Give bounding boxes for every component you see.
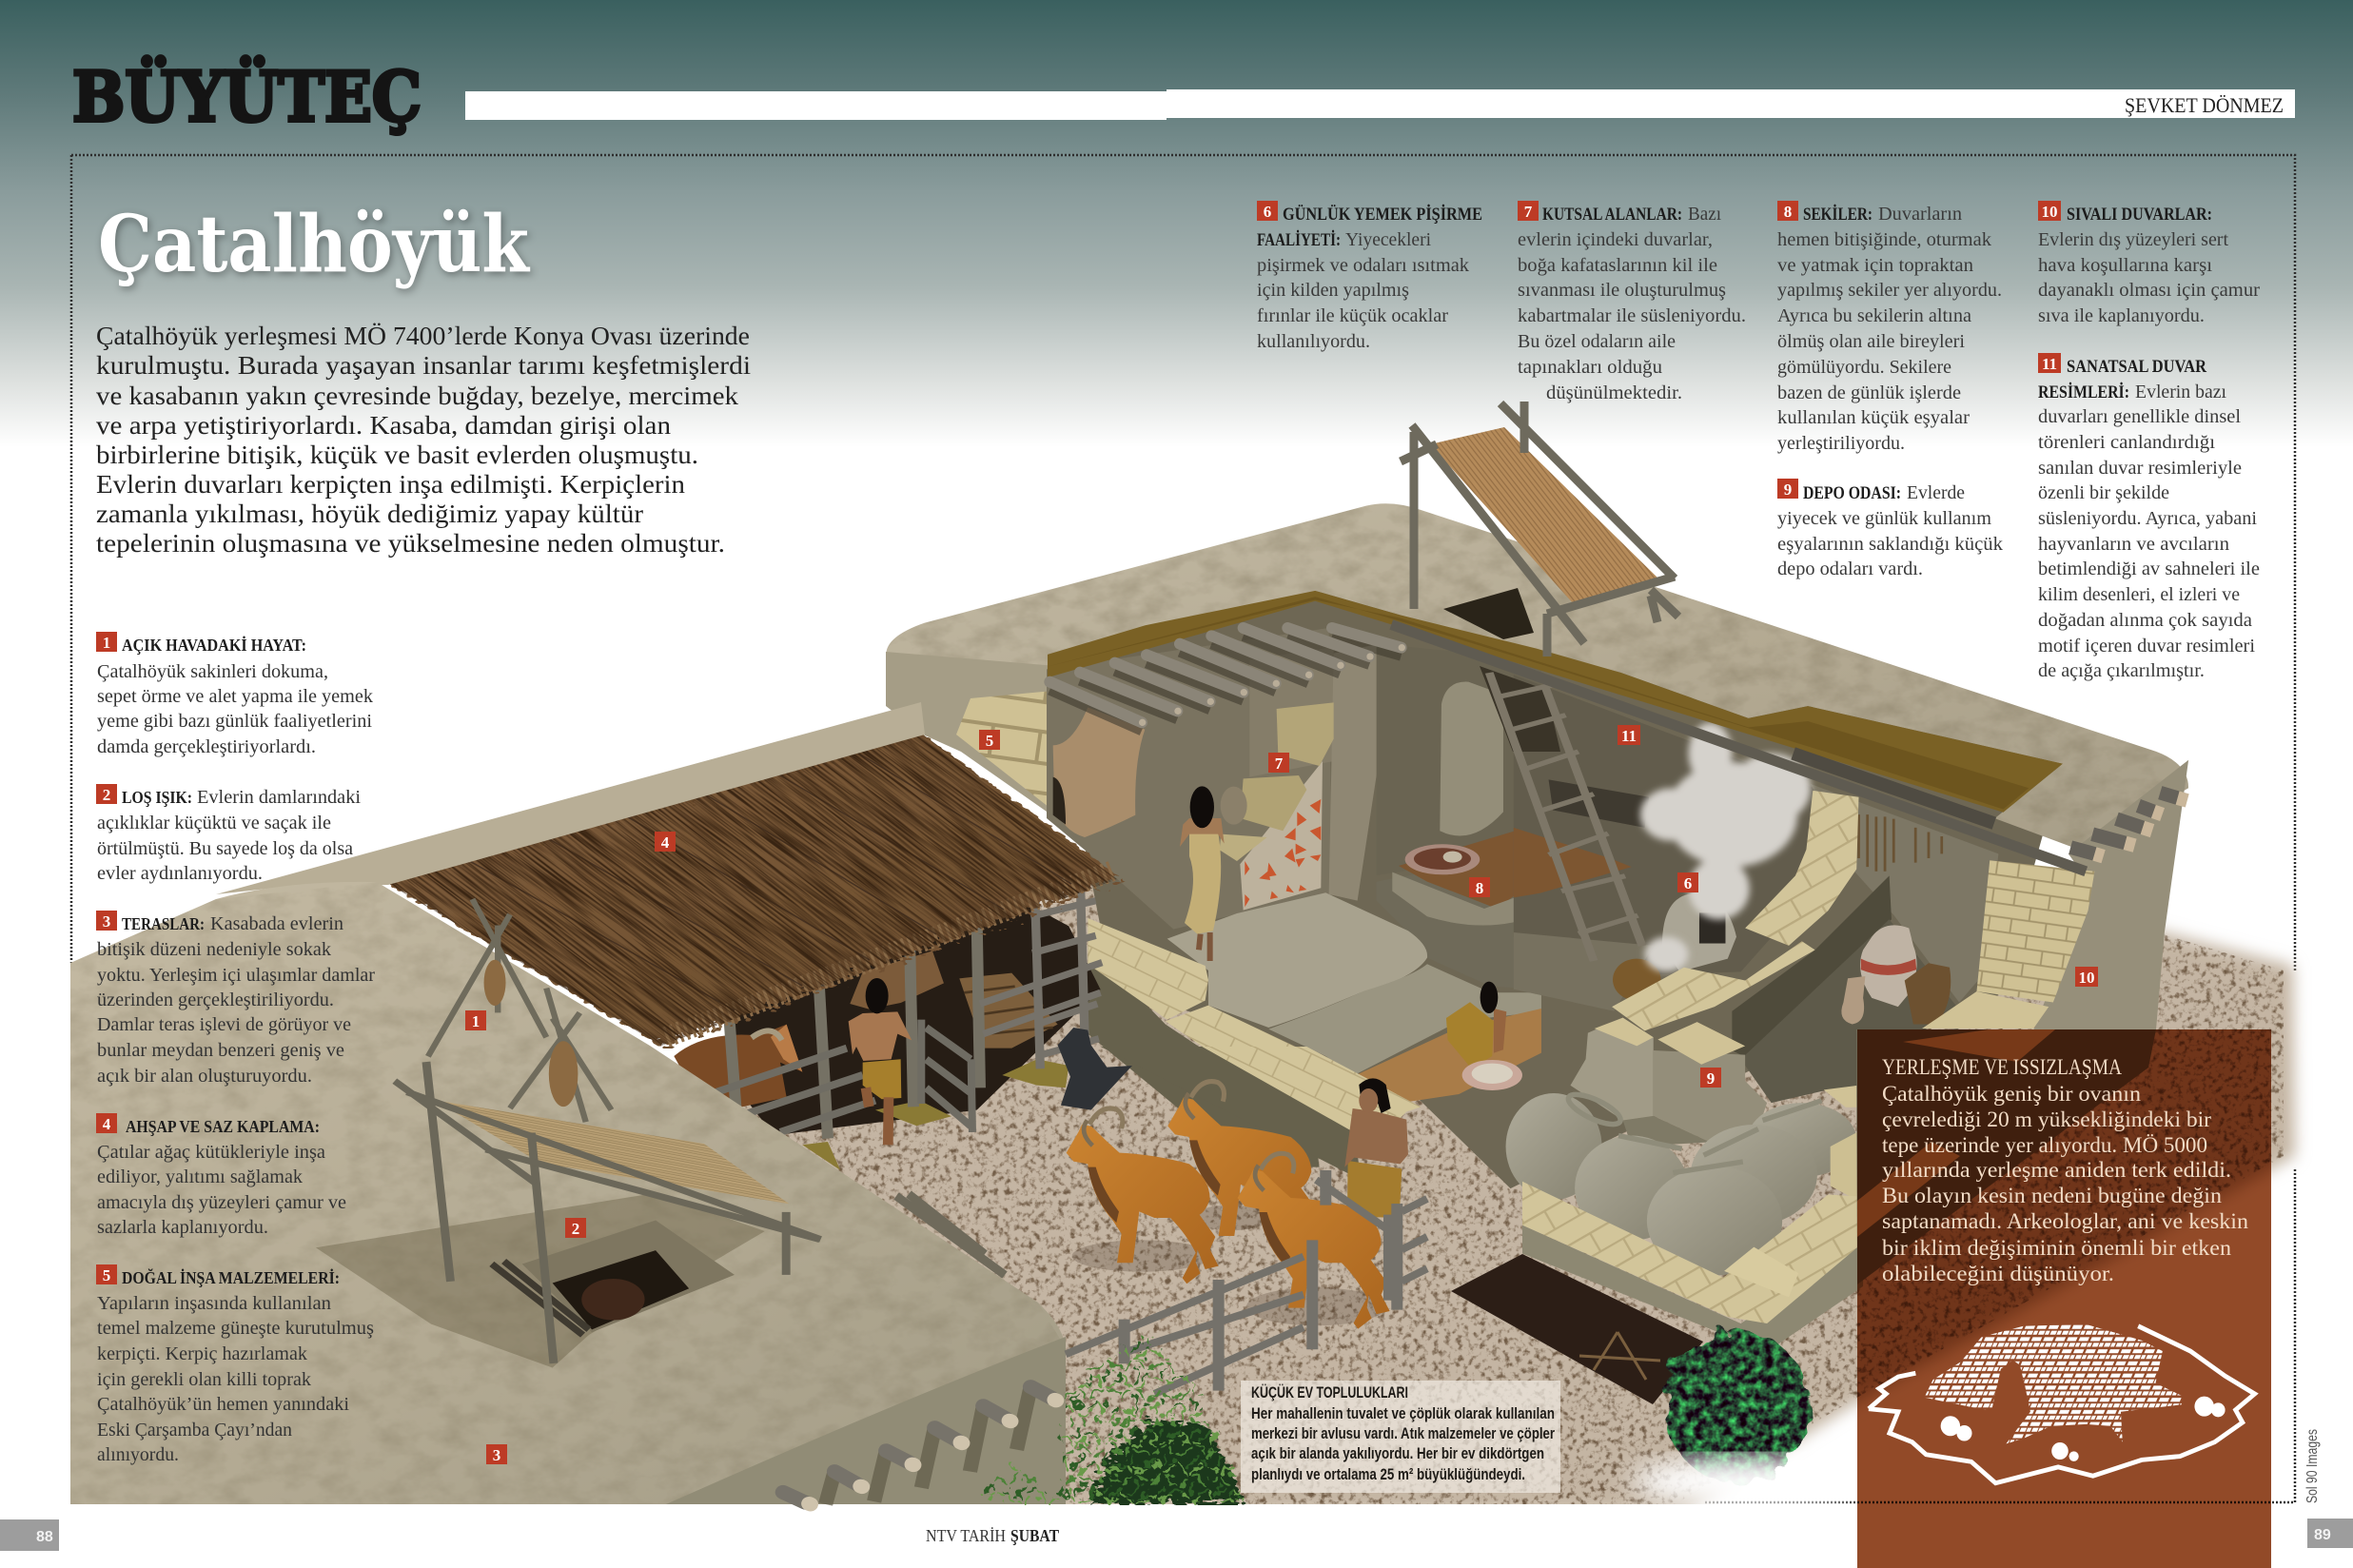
note 6: daily cooking: 6	[1264, 203, 1271, 221]
note 2: dim light	[96, 784, 361, 884]
footer: magazine name: NTV TARİH	[926, 1526, 1006, 1545]
note 5: natural building materials: DOĞAL İNŞA MALZEMELERİ:	[122, 1267, 340, 1287]
shelter shadow	[316, 1193, 765, 1368]
callout numbers on illustration: 6	[1684, 874, 1692, 892]
intro paragraph: kurulmuştu. Burada yaşayan insanlar tarımı keşfetmişlerdi	[96, 351, 751, 380]
terrace hatch and shelter	[316, 899, 1056, 1504]
section title: BÜYÜTEÇ: BÜYÜTEÇ	[72, 55, 422, 137]
front-left wall continuation	[1101, 1047, 1421, 1180]
dark opening behind ladder	[1480, 666, 1560, 752]
note 7: sacred areas	[1518, 201, 1746, 403]
long inner wall face	[1732, 875, 1892, 1057]
note 11: artistic wall paintings: RESİMLERİ:	[2038, 382, 2129, 402]
animal hide	[1053, 707, 1145, 837]
callout numbers on illustration: 5	[986, 732, 993, 750]
brick ledge	[1220, 834, 1267, 861]
panel text	[1882, 1055, 2249, 1285]
note 6: daily cooking	[1257, 201, 1482, 352]
shelter reed panel	[1430, 427, 1661, 604]
note 3: terraces: bunlar meydan benzeri geniş ve	[97, 1040, 344, 1061]
note 8: benches: gömülüyordu. Sekilere	[1777, 357, 1951, 378]
note 6: daily cooking: kullanılıyordu.	[1257, 331, 1370, 352]
straw mats	[802, 1059, 1069, 1170]
note 5: natural building materials: Eski Çarşamba Çayı’ndan	[97, 1420, 292, 1441]
panel: settlement and abandonment	[1857, 1029, 2271, 1568]
note 10: plastered walls: dayanaklı olması için çamur	[2038, 280, 2260, 301]
front brick wall top	[1522, 1182, 1863, 1323]
page edge mask below illustration	[971, 1505, 1294, 1534]
panel text: çevrelediği 20 m yüksekliğindeki bir	[1882, 1107, 2211, 1131]
note 2: dim light: örtülmüştü. Bu sayede loş da olsa	[97, 838, 353, 859]
note 5: natural building materials: Yapıların inşasında kullanılan	[97, 1293, 331, 1314]
note 2: dim light: evler aydınlanıyordu.	[97, 863, 263, 884]
panel text: olabileceğini düşünüyor.	[1882, 1262, 2114, 1285]
note 4: wood and reed covering: AHŞAP VE SAZ KAPLAMA:	[126, 1117, 320, 1136]
note 9: storeroom: DEPO ODASI:	[1803, 483, 1901, 503]
wall face	[1101, 1047, 1361, 1180]
note 11: artistic wall paintings: hayvanların ve avcıların	[2038, 534, 2229, 555]
note 3: terraces: yoktu. Yerleşim içi ulaşımlar damlar	[97, 965, 375, 986]
note 1: open-air life: Çatalhöyük sakinleri dokuma,	[97, 661, 328, 682]
note 2: dim light: Evlerin damlarındaki	[197, 787, 361, 808]
note 2: dim light: LOŞ IŞIK:	[122, 788, 192, 807]
shrub	[1632, 1330, 1860, 1506]
callout: small house communities: Her mahallenin tuvalet ve çöplük olarak kullanılan	[1251, 1404, 1555, 1422]
stone pier	[1249, 647, 1334, 777]
intro paragraph: ve kasabanın yakın çevresinde buğday, bezelye, mercimek	[96, 382, 739, 410]
footer: magazine name: ŞUBAT	[1010, 1526, 1059, 1545]
storage pots	[1841, 925, 1951, 1024]
note 11: artistic wall paintings: kilim desenleri, el izleri ve	[2038, 584, 2240, 605]
icon: settlement mound	[1869, 1324, 2255, 1483]
note 11: artistic wall paintings: 11	[2042, 355, 2057, 373]
note 11: artistic wall paintings: süsleniyordu. Ayrıca, yabani	[2038, 508, 2257, 529]
callout: small house communities	[1241, 1381, 1560, 1493]
rafter ends	[1139, 644, 1405, 726]
note 1: open-air life: sepet örme ve alet yapma ile yemek	[97, 686, 373, 707]
ladder	[1489, 673, 1642, 961]
note 10: plastered walls: hava koşullarına karşı	[2038, 255, 2212, 276]
grain sacks	[1506, 1093, 1856, 1275]
note 4: wood and reed covering: 4	[103, 1115, 111, 1133]
note 10: plastered walls: Evlerin dış yüzeyleri sert	[2038, 229, 2228, 250]
stepped brick wall	[1745, 791, 1859, 946]
smoky room back wall	[1514, 675, 1815, 976]
front-left wall face	[1088, 945, 1320, 1167]
header bar	[465, 89, 2295, 120]
note 8: benches: hemen bitişiğinde, oturmak	[1777, 229, 1991, 250]
page number 88	[0, 1519, 59, 1551]
note 8: benches: ve yatmak için topraktan	[1777, 255, 1973, 276]
stabled goat	[674, 1025, 802, 1107]
man beside fence	[1344, 1078, 1408, 1218]
hatch ladder logs	[492, 1262, 589, 1335]
note 6: daily cooking: için kilden yapılmış	[1257, 280, 1409, 301]
back floor	[1377, 850, 1541, 990]
wall pegs	[783, 1387, 1051, 1502]
panel text: YERLEŞME VE ISSIZLAŞMA	[1882, 1055, 2122, 1079]
note 7: sacred areas: Bu özel odaların aile	[1518, 331, 1676, 352]
image credit: Sol 90 Images	[2304, 1429, 2321, 1503]
note 7: sacred areas: düşünülmektedir.	[1546, 382, 1682, 403]
callout numbers on illustration: 3	[493, 1446, 500, 1464]
note 3: terraces: bitişik düzeni nedeniyle sokak	[97, 939, 331, 960]
intro paragraph: ve arpa yetiştiriyorlardı. Kasaba, damdan girişi olan	[96, 411, 672, 440]
lower brick ledge	[1612, 941, 1815, 1030]
left room wall	[1047, 628, 1332, 930]
note 7: sacred areas: evlerin içindeki duvarlar,	[1518, 229, 1713, 250]
upper bricks	[1277, 702, 1334, 766]
back floor	[1514, 932, 1654, 1011]
callout numbers on illustration: 11	[1621, 727, 1637, 745]
clay jar	[1613, 959, 1661, 1001]
grain floor	[1356, 1009, 1541, 1104]
note 4: wood and reed covering: Çatılar ağaç kütükleriyle inşa	[97, 1142, 325, 1163]
foreground plant	[980, 1334, 1246, 1504]
long roof beam	[1391, 624, 2086, 872]
illustration: Çatalhöyük house cutaway	[70, 400, 2304, 1511]
note 4: wood and reed covering: amacıyla dış yüzeyleri çamur ve	[97, 1192, 346, 1213]
wall top	[1202, 1047, 1421, 1130]
intro paragraph: tepelerinin oluşmasına ve yükselmesine neden olmuştur.	[96, 529, 725, 558]
note 1: open-air life: yeme gibi bazı günlük faaliyetlerini	[97, 711, 372, 732]
left wall block with bricks	[886, 652, 1056, 818]
note 7: sacred areas: 7	[1524, 203, 1533, 221]
note 7: sacred areas: Bazı	[1688, 204, 1721, 225]
note 3: terraces: üzerinden gerçekleştiriliyordu.	[97, 990, 334, 1010]
panel text: yıllarında yerleşme aniden terk edildi.	[1882, 1158, 2231, 1182]
note 11: artistic wall paintings: duvarları genellikle dinsel	[2038, 406, 2241, 427]
note 11: artistic wall paintings: törenleri canlandırdığı	[2038, 432, 2215, 453]
sack rims	[1564, 1088, 1821, 1173]
storage room wall left	[1571, 1018, 1654, 1125]
crouching woman	[1446, 982, 1522, 1090]
page number 89: 89	[2314, 1527, 2331, 1543]
note 11: artistic wall paintings: Evlerin bazı	[2135, 382, 2226, 402]
note 5: natural building materials: için gerekli olan killi toprak	[97, 1369, 311, 1390]
hanging bag two	[549, 1041, 578, 1107]
note 9: storeroom: depo odaları vardı.	[1777, 559, 1923, 579]
note 9: storeroom: Evlerde	[1907, 482, 1965, 503]
note 9: storeroom: yiyecek ve günlük kullanım	[1777, 508, 1991, 529]
note 1: open-air life: damda gerçekleştiriyorlardı.	[97, 736, 316, 757]
stable dark interior	[723, 904, 1101, 1135]
note 6: daily cooking: fırınlar ile küçük ocaklar	[1257, 305, 1448, 326]
panel text: tepe üzerinde yer alıyordu. MÖ 5000	[1882, 1133, 2207, 1157]
panel text: bir iklim değişiminin önemli bir etken	[1882, 1236, 2232, 1260]
hatch hole wall	[522, 1221, 735, 1332]
back wall	[1377, 644, 1541, 875]
intro paragraph: zamanla yıkılması, höyük dediğimiz yapay kültür	[96, 500, 643, 528]
note 8: benches: Ayrıca bu sekilerin altına	[1777, 305, 1971, 326]
note 10: plastered walls: sıva ile kaplanıyordu.	[2038, 305, 2205, 326]
right room back wall	[1811, 784, 1998, 1003]
hearth oven	[1662, 893, 1736, 971]
lower floor	[1268, 964, 1541, 1075]
note 10: plastered walls: 10	[2042, 203, 2057, 221]
note 3: terraces: 3	[103, 912, 110, 931]
long parapet ridge	[216, 702, 925, 894]
note 7: sacred areas: boğa kafataslarının kil ile	[1518, 255, 1717, 276]
person in hatch	[581, 1279, 645, 1321]
terrace roof	[70, 880, 1066, 1504]
standing woman	[1180, 786, 1225, 961]
panel text: Bu olayın kesin nedeni bugüne değin	[1882, 1184, 2223, 1207]
back-right wall slab	[1824, 1086, 1863, 1107]
right outer wall	[2029, 760, 2188, 1042]
brick block	[1088, 918, 1208, 1020]
room floor	[1741, 919, 1964, 1103]
note 3: terraces: TERASLAR:	[122, 914, 205, 933]
goat 3	[1238, 1153, 1390, 1329]
hanging tools	[1859, 814, 1942, 872]
house interior base	[1048, 591, 2063, 1188]
brick wall top band	[1166, 1006, 1415, 1154]
shelter reed panel	[434, 1100, 789, 1204]
header bar: ŞEVKET DÖNMEZ	[2125, 93, 2284, 117]
note 5: natural building materials: 5	[103, 1266, 110, 1284]
note 6: daily cooking: Yiyecekleri	[1345, 229, 1431, 250]
courtyard fence	[1066, 1170, 1427, 1394]
floor brick sill	[1922, 991, 2049, 1029]
note 5: natural building materials: temel malzeme güneşte kurutulmuş	[97, 1318, 374, 1339]
hatch dark opening	[553, 1250, 689, 1329]
stable fence	[716, 1020, 972, 1132]
wall doorway	[1053, 777, 1066, 825]
callout numbers on illustration: 4	[661, 833, 670, 852]
hanging bag one	[484, 960, 506, 1006]
note 11: artistic wall paintings: özenli bir şekilde	[2038, 482, 2169, 503]
pit below house	[1451, 1254, 1703, 1404]
note 4: wood and reed covering: ediliyor, yalıtımı sağlamak	[97, 1166, 303, 1187]
roof texture	[912, 506, 2160, 845]
note 8: benches: Duvarların	[1878, 204, 1962, 225]
callout numbers on illustration: 8	[1476, 879, 1483, 897]
thatch roof surface	[385, 735, 1121, 1047]
note 8: benches: kullanılan küçük eşyalar	[1777, 407, 1970, 428]
callout numbers on illustration: 2	[572, 1220, 579, 1238]
note 11: artistic wall paintings: betimlendiği av sahneleri ile	[2038, 559, 2260, 579]
note 3: terraces: Kasabada evlerin	[210, 913, 343, 934]
note 3: terraces: açık bir alan oluşturuyordu.	[97, 1066, 312, 1087]
note 5: natural building materials: kerpiçti. Kerpiç hazırlamak	[97, 1343, 307, 1364]
note 11: artistic wall paintings: motif içeren duvar resimleri	[2038, 636, 2255, 657]
thatched roof section	[1048, 591, 2063, 813]
shelter poles	[395, 1062, 821, 1363]
callout numbers on illustration: 7	[1275, 755, 1284, 773]
note 5: natural building materials: alınıyordu.	[97, 1444, 179, 1465]
right brick stack	[1831, 1129, 1863, 1204]
note 8: benches	[1777, 201, 2002, 454]
note 1: open-air life: AÇIK HAVADAKİ HAYAT:	[122, 636, 306, 655]
rafter logs	[1049, 628, 1402, 722]
rug	[1399, 823, 1541, 909]
note 8: benches: yapılmış sekiler yer alıyordu.	[1777, 280, 2002, 301]
bright brick slab	[1724, 1247, 1798, 1297]
second stabled animal	[850, 951, 944, 1009]
note 8: benches: SEKİLER:	[1803, 205, 1873, 225]
panel text: Çatalhöyük geniş bir ovanın	[1882, 1082, 2142, 1106]
goat 1	[1067, 1108, 1219, 1284]
tripod one	[428, 899, 546, 1056]
note 9: storeroom: 9	[1784, 480, 1792, 499]
page number 89	[2307, 1519, 2353, 1548]
bowl on bench	[1405, 844, 1480, 874]
thatch straw texture	[390, 735, 1117, 1046]
note 7: sacred areas: KUTSAL ALANLAR:	[1542, 205, 1682, 225]
dark shelf of tools	[1549, 779, 1649, 828]
note 1: open-air life	[96, 632, 373, 757]
page number 88: 88	[36, 1529, 53, 1545]
callout numbers on illustration: 10	[2078, 969, 2095, 987]
callout: small house communities: KÜÇÜK EV TOPLULUKLARI	[1251, 1383, 1408, 1401]
stepped bricks	[1240, 775, 1306, 831]
storage room floor	[1623, 1116, 1710, 1147]
right side of house	[1506, 675, 2188, 1352]
rafter shadows	[1049, 636, 1402, 731]
stable under thatch	[674, 868, 1132, 1170]
note 11: artistic wall paintings: sanılan duvar resimleriyle	[2038, 458, 2242, 479]
intro paragraph: birbirlerine bitişik, küçük ve basit evlerden oluşmuştu.	[96, 441, 698, 469]
clay pot in niche	[1221, 787, 1247, 825]
courtyard log bundle	[896, 1194, 1005, 1275]
note 10: plastered walls	[2038, 201, 2260, 326]
footer: magazine name	[926, 1526, 1059, 1545]
note 4: wood and reed covering	[96, 1113, 346, 1238]
peg ends	[809, 1400, 1056, 1504]
peg shadows	[826, 1387, 1030, 1504]
storage room wall right	[1654, 1050, 1767, 1142]
ground courtyard	[0, 856, 2295, 1533]
ladder at stable	[980, 868, 1102, 1068]
note 11: artistic wall paintings: de açığa çıkarılmıştır.	[2038, 660, 2205, 681]
note 9: storeroom	[1777, 479, 2003, 579]
oven mouth	[1699, 912, 1725, 944]
shelter poles	[1401, 402, 1678, 657]
house shell	[886, 503, 2188, 1188]
tripod two	[510, 989, 611, 1122]
dog	[1058, 1028, 1132, 1110]
callout numbers on illustration	[465, 725, 2098, 1464]
rafters	[1049, 628, 1405, 731]
roof shelter on hatch	[1401, 402, 1678, 657]
column	[1329, 644, 1380, 901]
note 8: benches: yerleştiriliyordu.	[1777, 433, 1905, 454]
smoke	[1640, 723, 1811, 971]
note 7: sacred areas: tapınakları olduğu	[1518, 357, 1662, 378]
brick tops	[1595, 1018, 1745, 1065]
note 5: natural building materials: Çatalhöyük’ün hemen yanındaki	[97, 1394, 349, 1415]
callout numbers on illustration: 1	[472, 1012, 480, 1030]
rug continuation	[1514, 828, 1632, 897]
note 2: dim light: 2	[103, 786, 110, 804]
note 8: benches: ölmüş olan aile bireyleri	[1777, 331, 1965, 352]
note 1: open-air life: 1	[103, 634, 110, 652]
note 10: plastered walls: SIVALI DUVARLAR:	[2067, 205, 2212, 225]
intro paragraph: Çatalhöyük yerleşmesi MÖ 7400’lerde Konya Ovası üzerinde	[96, 322, 750, 350]
intro paragraph: Evlerin duvarları kerpiçten inşa edilmişti. Kerpiçlerin	[96, 470, 686, 499]
note 3: terraces: Damlar teras işlevi de görüyor ve	[97, 1014, 351, 1035]
courtyard scene	[1066, 1078, 1427, 1394]
main title: Çatalhöyük: Çatalhöyük	[98, 199, 531, 290]
goat shadows	[1072, 1205, 1386, 1325]
man in stable	[849, 978, 912, 1145]
callout: small house communities: planlıydı ve ortalama 25 m² büyüklüğündeydi.	[1251, 1465, 1525, 1483]
wall painting with triangles	[1240, 761, 1323, 911]
raised platform floor	[1167, 892, 1427, 1028]
note 11: artistic wall paintings	[2038, 353, 2260, 681]
note 6: daily cooking: GÜNLÜK YEMEK PİŞİRME	[1283, 205, 1482, 225]
long beams and pegs	[1391, 624, 2187, 872]
note 11: artistic wall paintings: SANATSAL DUVAR	[2067, 357, 2206, 377]
short roof log	[1794, 754, 1994, 823]
front wall face	[1522, 1225, 1863, 1352]
hatch hole	[1443, 588, 1534, 639]
note 2: dim light: açıklıklar küçüktü ve saçak ile	[97, 813, 331, 833]
note 6: daily cooking: pişirmek ve odaları ısıtmak	[1257, 255, 1469, 276]
note 8: benches: 8	[1784, 203, 1792, 221]
roof surface	[886, 503, 2188, 850]
wall pegs	[2070, 793, 2187, 856]
terrace front wall face	[666, 1337, 1066, 1504]
note 6: daily cooking: FAALİYETİ:	[1257, 230, 1341, 250]
callout numbers on illustration: 9	[1707, 1069, 1715, 1088]
page background gradient	[0, 0, 2353, 447]
note 9: storeroom: eşyalarının saklandığı küçük	[1777, 534, 2003, 555]
note 8: benches: bazen de günlük işlerde	[1777, 382, 1961, 403]
callout: small house communities: merkezi bir avlusu vardı. Atık malzemeler ve çöpler	[1251, 1424, 1555, 1442]
left room interior	[1047, 628, 1541, 1167]
callout: small house communities: açık bir alanda yakılıyordu. Her bir ev dikdörtgen	[1251, 1444, 1544, 1462]
bench edge	[1392, 872, 1541, 926]
stable posts	[728, 920, 980, 1139]
note 3: terraces	[96, 911, 375, 1087]
panel text: saptanamadı. Arkeologlar, ani ve keskin	[1882, 1209, 2249, 1233]
firewood stack	[959, 973, 1058, 1049]
note 11: artistic wall paintings: doğadan alınma çok sayıda	[2038, 610, 2252, 631]
note 4: wood and reed covering: sazlarla kaplanıyordu.	[97, 1217, 268, 1238]
house section under red panel	[1856, 1029, 2156, 1284]
goat 2	[1167, 1082, 1320, 1257]
note 7: sacred areas: sıvanması ile oluşturulmuş	[1518, 280, 1726, 301]
arched niche	[1440, 682, 1503, 836]
note 7: sacred areas: kabartmalar ile süsleniyordu.	[1518, 305, 1746, 326]
note 5: natural building materials	[96, 1264, 374, 1465]
right brick pier	[1976, 860, 2094, 1003]
intro paragraph	[96, 322, 751, 558]
